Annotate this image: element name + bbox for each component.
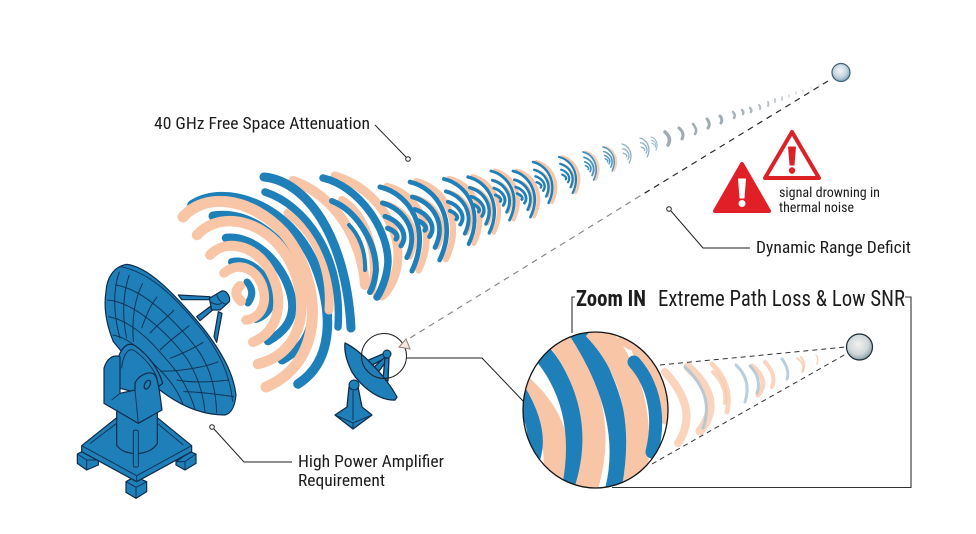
feed horn and struts bbox=[178, 291, 230, 342]
label: high power amplifier requirement: Requirement bbox=[298, 471, 385, 491]
small receiving dish bbox=[335, 343, 397, 429]
faded wave arcs inside the zoom cone bbox=[665, 355, 818, 443]
heading: zoom in: Zoom IN bbox=[576, 287, 646, 312]
base platform bbox=[82, 418, 192, 482]
label: 40 GHz free space attenuation: 40 GHz Free Space Attenuation bbox=[154, 114, 370, 134]
label: high power amplifier requirement bbox=[210, 425, 444, 491]
icon: filled red warning triangle bbox=[715, 164, 769, 211]
far, fading signal marks bbox=[665, 84, 819, 145]
small pedestal bbox=[335, 387, 372, 429]
warning caption: signal drowning in bbox=[779, 185, 880, 201]
wavefront group: third arc set bbox=[323, 176, 398, 297]
column bbox=[117, 410, 157, 467]
feet bbox=[77, 450, 196, 498]
label: dynamic range deficit: Dynamic Range Deficit bbox=[756, 238, 911, 258]
connector from source circle to zoom lens bbox=[407, 358, 524, 402]
icon: outlined red warning triangle bbox=[765, 132, 819, 178]
dashed return path to the distant satellite bbox=[410, 81, 828, 338]
large dish antenna bbox=[77, 264, 236, 498]
small dish struts bbox=[364, 353, 388, 367]
back mount bbox=[117, 344, 163, 395]
signal attenuating wave fans along the beam bbox=[380, 137, 657, 271]
yoke bbox=[104, 356, 162, 423]
warning caption: thermal noise bbox=[779, 200, 854, 216]
zoom cone dashed lines bbox=[652, 347, 846, 464]
label: high power amplifier requirement: High Power Amplifier bbox=[298, 452, 444, 472]
warning caption bbox=[779, 185, 880, 216]
zoom source circle bbox=[362, 334, 406, 378]
zoom lens: magnified wave stripes bbox=[518, 328, 668, 492]
zoom frame bracket bbox=[572, 297, 911, 488]
small dish bowl bbox=[345, 343, 397, 400]
icon: distant satellite sphere bbox=[832, 64, 850, 82]
wavefront group: expanding signal arcs near the large dish bbox=[183, 197, 327, 387]
heading: zoom in: Extreme Path Loss & Low SNR bbox=[658, 287, 905, 312]
wavefront group: second arc set bbox=[264, 177, 365, 328]
label: 40 GHz free space attenuation bbox=[154, 114, 410, 161]
dish bowl and grid bbox=[105, 264, 236, 415]
arrowhead at the small dish bbox=[399, 339, 410, 349]
label: dynamic range deficit bbox=[667, 207, 911, 258]
icon: target sphere in zoom view bbox=[846, 334, 872, 360]
